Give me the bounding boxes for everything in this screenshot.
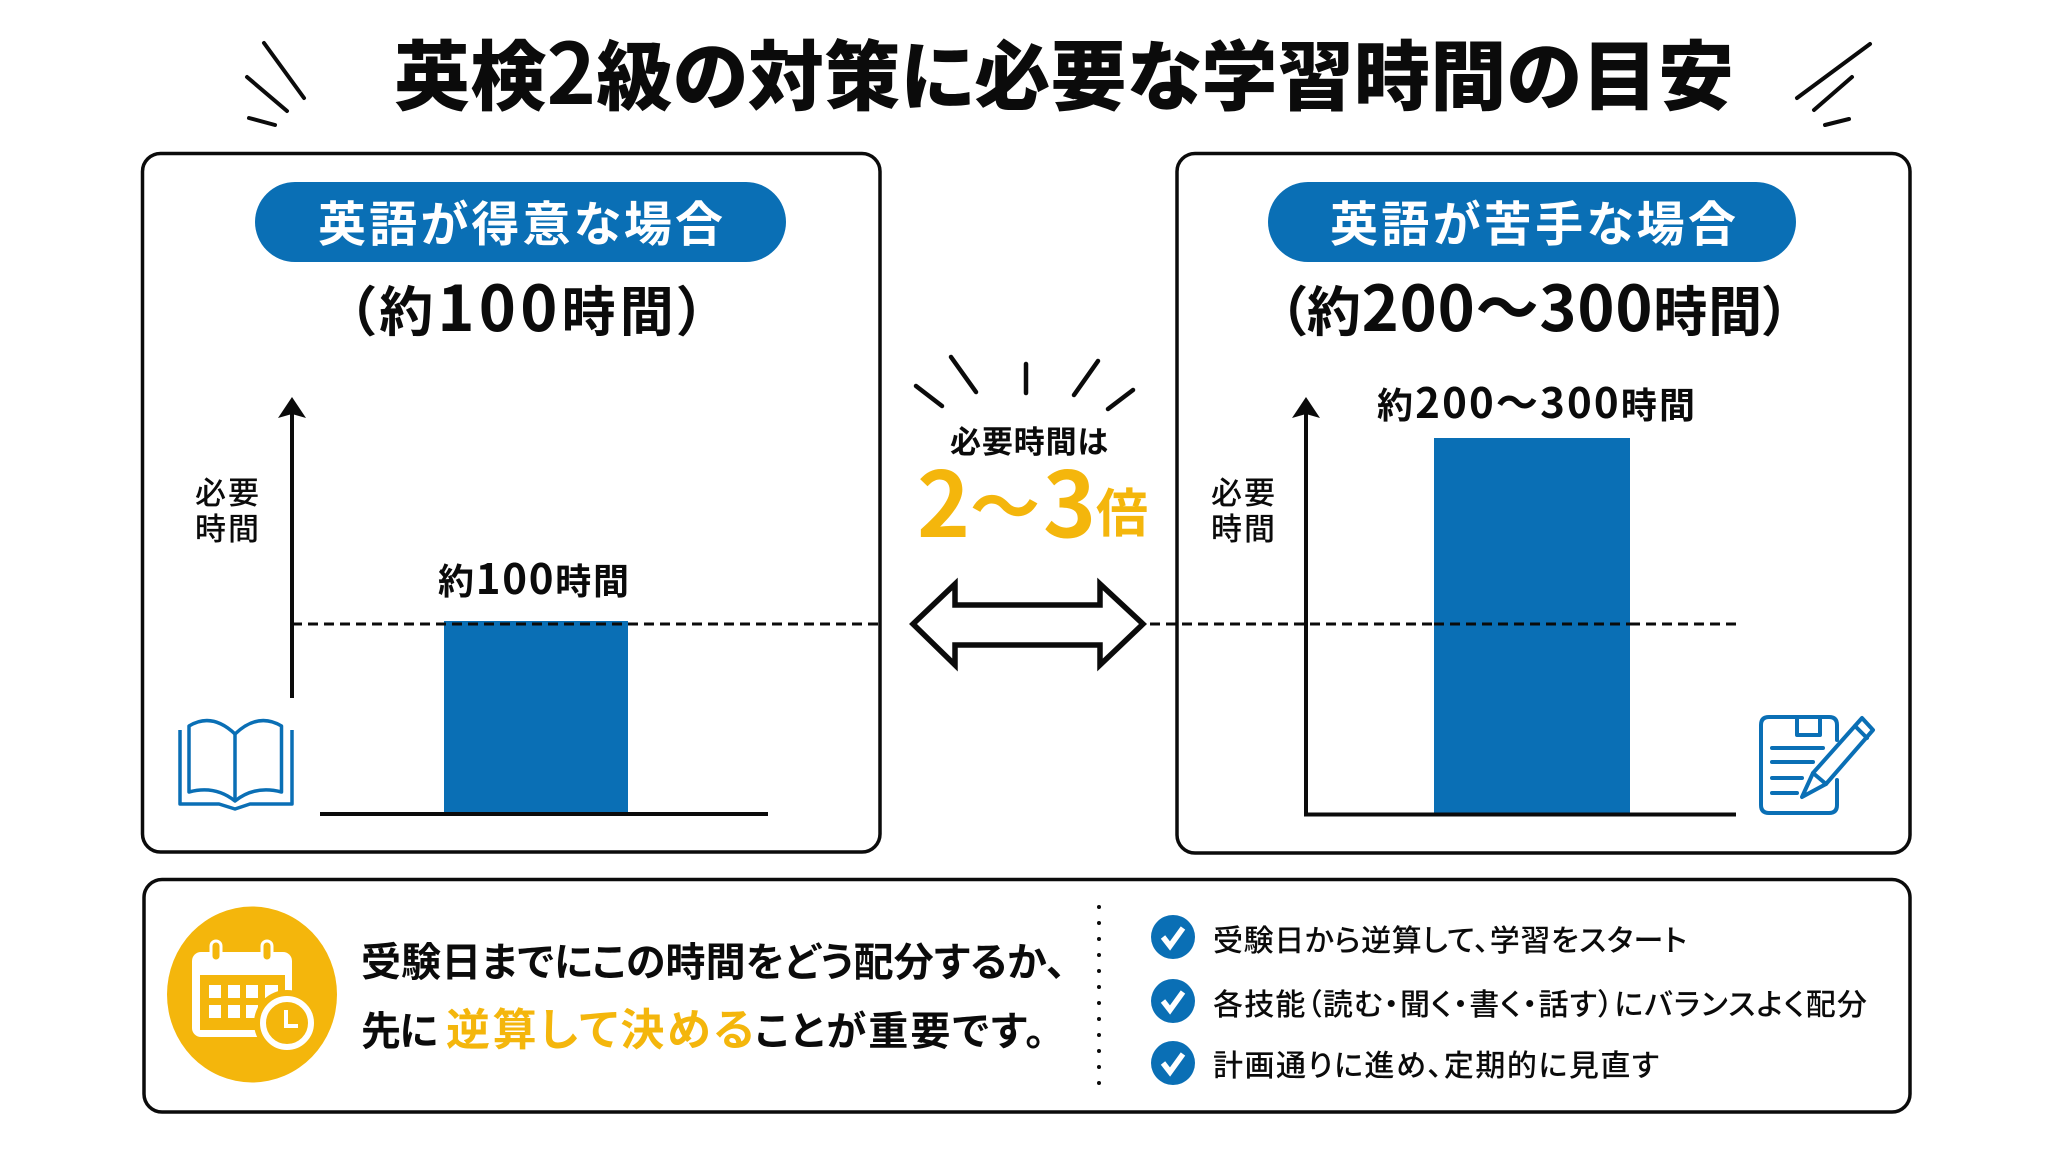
- dotted divider: [1097, 907, 1101, 1088]
- y axis label: 時間: [1211, 504, 1275, 549]
- heading pill: [255, 182, 786, 262]
- panel: weak in English: [1177, 154, 1910, 853]
- multiplier unit: 倍: [1096, 472, 1148, 547]
- icon: document and pencil: [1761, 717, 1873, 813]
- y axis label: 必要: [195, 468, 259, 513]
- check item 1: 受験日から逆算して、学習をスタート: [1213, 916, 1687, 960]
- reference dashed line across panels: [292, 622, 1740, 626]
- heading pill: 英語が得意な場合: [318, 185, 723, 255]
- panel frame: [142, 154, 880, 852]
- y axis arrow: [278, 397, 306, 698]
- heading pill: [1268, 182, 1796, 262]
- bar value label: 約100時間: [438, 546, 629, 607]
- bar: [444, 621, 628, 814]
- multiplier number: [917, 433, 1096, 563]
- icon: left title emphasis rays: [247, 43, 304, 125]
- dashed reference overlay on bar: [1434, 622, 1630, 626]
- callout label: 必要時間は: [950, 417, 1108, 462]
- bar: [1434, 438, 1630, 814]
- icon: open book: [180, 721, 292, 809]
- centre comparison callout: [913, 357, 1148, 665]
- advice text: ことが重要です。: [755, 999, 1045, 1057]
- panel frame: [144, 880, 1910, 1112]
- checklist: [1151, 915, 1867, 1085]
- check item 3: 計画通りに進め、定期的に見直す: [1213, 1041, 1659, 1085]
- baseline: [320, 812, 768, 816]
- multiplier number: 2: [917, 433, 970, 563]
- y axis label: 必要: [1211, 468, 1275, 513]
- baseline: [1304, 812, 1736, 816]
- icon: right title emphasis rays: [1797, 44, 1870, 125]
- advice text: 逆算して決める: [446, 994, 754, 1058]
- advice text: [361, 930, 1066, 1058]
- panel frame: [1177, 154, 1910, 853]
- double-headed arrow: [913, 584, 1143, 665]
- advice text: 受験日までにこの時間をどう配分するか、: [361, 930, 1066, 988]
- icon: calendar with clock: [167, 906, 337, 1082]
- y axis arrow: [1292, 397, 1320, 816]
- hours subheading: （約100時間）: [348, 259, 705, 350]
- advice text: 先に: [361, 999, 438, 1057]
- check item 2: 各技能（読む・聞く・書く・話す）にバランスよく配分: [1213, 980, 1867, 1024]
- panel: strong in English: [142, 154, 880, 852]
- hours subheading: （約200〜300時間）: [1279, 259, 1790, 350]
- panel: planning advice: [144, 880, 1910, 1112]
- bar chart: about 100 hours: [195, 397, 768, 814]
- title: 英検2級の対策に必要な学習時間の目安: [394, 8, 1734, 129]
- multiplier number: 〜: [970, 452, 1040, 553]
- icon: emphasis rays: [916, 357, 1133, 409]
- y axis label: 時間: [195, 504, 259, 549]
- bar value label: 約200〜300時間: [1377, 370, 1695, 431]
- multiplier number: 3: [1043, 433, 1096, 563]
- heading pill: 英語が苦手な場合: [1330, 185, 1736, 255]
- bar chart: about 200 to 300 hours: [1211, 370, 1736, 816]
